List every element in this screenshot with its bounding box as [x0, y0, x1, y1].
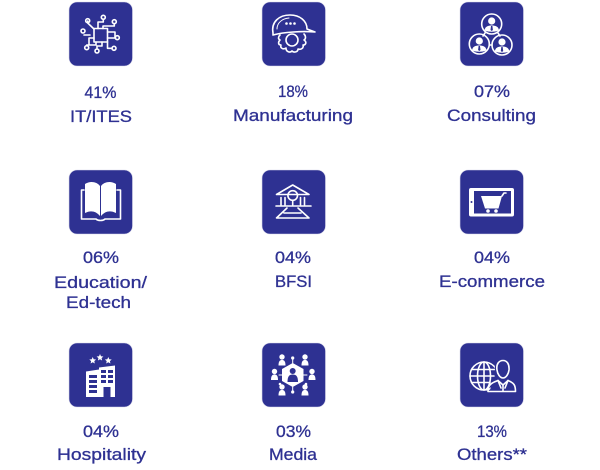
- icon: microchip: [69, 2, 132, 66]
- sector: Media: [262, 343, 326, 464]
- label: Education/: Education/: [54, 274, 147, 292]
- value: 04%: 04%: [474, 249, 510, 267]
- value: 06%: 06%: [83, 249, 119, 267]
- label: BFSI: BFSI: [275, 273, 312, 291]
- icon: hotel with stars: [69, 343, 132, 407]
- sector: Consulting: [447, 2, 536, 125]
- value: 07%: 07%: [474, 83, 510, 101]
- value: 04%: 04%: [83, 423, 119, 441]
- value: 03%: 03%: [276, 423, 311, 441]
- icon: helmet and gear: [262, 2, 326, 66]
- value: 04%: 04%: [275, 249, 311, 267]
- icon: people network: [262, 343, 326, 407]
- icon: bank building: [262, 170, 326, 234]
- value: 41%: 41%: [84, 84, 117, 102]
- label: IT/ITES: IT/ITES: [70, 108, 132, 126]
- label: Media: Media: [269, 446, 318, 464]
- icon: connected people: [460, 2, 524, 66]
- label: Manufacturing: Manufacturing: [233, 107, 353, 125]
- label: Consulting: Consulting: [447, 107, 536, 125]
- label: Others**: Others**: [457, 446, 528, 464]
- value: 18%: 18%: [278, 83, 308, 101]
- icon: open book: [69, 170, 132, 234]
- label: Ed-tech: Ed-tech: [66, 294, 131, 312]
- sector: IT/ITES: [69, 2, 132, 126]
- sector: Others: [457, 343, 528, 464]
- value: 13%: 13%: [477, 423, 507, 441]
- sector: Education/Ed-tech: [54, 170, 147, 312]
- icon: tablet with cart: [460, 170, 524, 234]
- label: Hospitality: Hospitality: [57, 446, 147, 464]
- sector: Hospitality: [57, 343, 147, 464]
- label: E-commerce: E-commerce: [439, 273, 545, 291]
- icon: globe and businessperson: [460, 343, 524, 407]
- sector: BFSI: [262, 170, 326, 291]
- sector: Manufacturing: [233, 2, 353, 125]
- sector: E-commerce: [439, 170, 545, 291]
